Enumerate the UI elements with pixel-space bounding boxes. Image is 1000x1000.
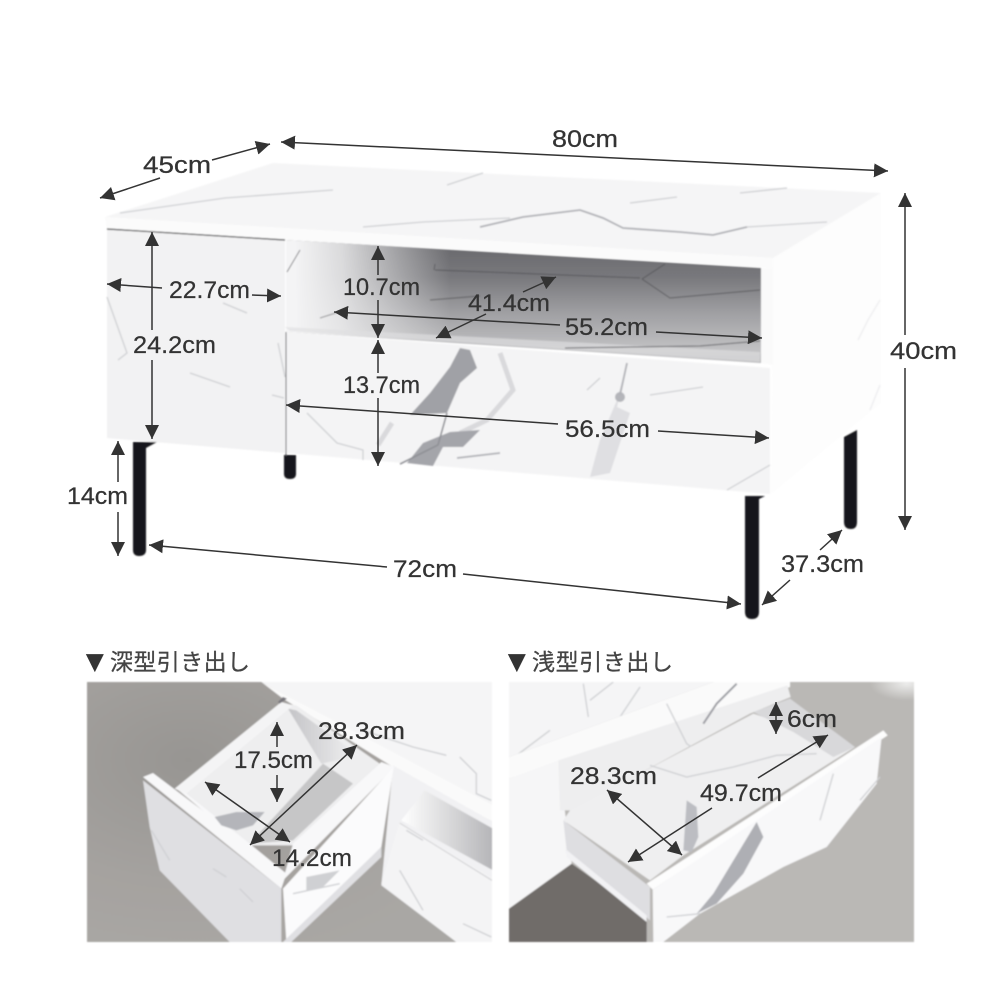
table top surface [105, 163, 881, 258]
dimension: leg depth 37.3cm: 37.3cm [781, 551, 864, 578]
dimension: depth 45cm [100, 144, 270, 198]
dimension: drawer width 49.7cm [628, 735, 828, 862]
dimension: shelf depth 41.4cm: 41.4cm [468, 290, 550, 317]
dimension: drawer depth 28.3cm [250, 718, 405, 845]
dimension: shelf depth 41.4cm [436, 277, 556, 338]
dimension: door width 22.7cm [107, 277, 281, 304]
dimension: leg span 72cm [149, 545, 741, 604]
dimension: door width 22.7cm: 22.7cm [169, 277, 250, 304]
open shelf recess [285, 240, 773, 365]
dimension: shelf height 10.7cm [343, 246, 420, 338]
dimension: drawer width 56.5cm [286, 405, 769, 443]
dimension: drawer width 49.7cm: 49.7cm [700, 780, 782, 807]
dimension: drawer depth 28.3cm: 28.3cm [570, 763, 657, 790]
dimension: shelf width 55.2cm [334, 312, 762, 341]
heading: shallow drawer: 浅型引き出し [532, 649, 673, 675]
photo: shallow drawer open [509, 667, 943, 942]
dimension: drawer width 56.5cm: 56.5cm [565, 416, 650, 443]
dimension: depth 45cm: 45cm [143, 152, 211, 179]
dimension: leg span 72cm: 72cm [393, 556, 457, 583]
panel: deep drawer photo [87, 682, 493, 942]
dimension: door height 24.2cm: 24.2cm [133, 332, 216, 359]
dimension: leg height 14cm [67, 441, 128, 556]
dimension: drawer height 17.5cm [234, 722, 313, 802]
dimension: drawer height 13.7cm: 13.7cm [343, 372, 420, 399]
dimension: drawer height 13.7cm [343, 340, 420, 466]
heading: deep drawer: 深型引き出し [110, 649, 250, 675]
dimension: leg height 14cm: 14cm [67, 483, 128, 510]
photo: deep drawer open [87, 682, 493, 942]
dimension: drawer depth 28.3cm: 28.3cm [318, 718, 405, 745]
dimension: drawer height 17.5cm: 17.5cm [234, 747, 313, 774]
dimension: drawer height 6cm: 6cm [787, 706, 837, 733]
left front door panel [107, 229, 285, 453]
heading: deep drawer: ▼ [86, 649, 104, 675]
right side panel [771, 193, 881, 494]
table top front edge [105, 217, 773, 268]
dimension: height 40cm: 40cm [890, 338, 957, 365]
dimension: width 80cm [281, 126, 888, 171]
table legs [133, 430, 857, 619]
dimension: leg depth 37.3cm [762, 530, 864, 605]
dimension: width 80cm: 80cm [552, 126, 618, 153]
dimension: drawer width 14.2cm [205, 782, 352, 872]
main product: marble coffee table [105, 163, 881, 619]
dimension: shelf height 10.7cm: 10.7cm [343, 274, 420, 301]
panel: shallow drawer photo [509, 667, 943, 942]
dimension: drawer width 14.2cm: 14.2cm [272, 845, 352, 872]
heading: shallow drawer: ▼ [508, 649, 526, 675]
lower drawer front with marble veining [286, 332, 770, 494]
dimension: drawer depth 28.3cm [570, 763, 682, 855]
dimension: shelf width 55.2cm: 55.2cm [565, 314, 648, 341]
dimension: drawer height 6cm [776, 702, 837, 734]
